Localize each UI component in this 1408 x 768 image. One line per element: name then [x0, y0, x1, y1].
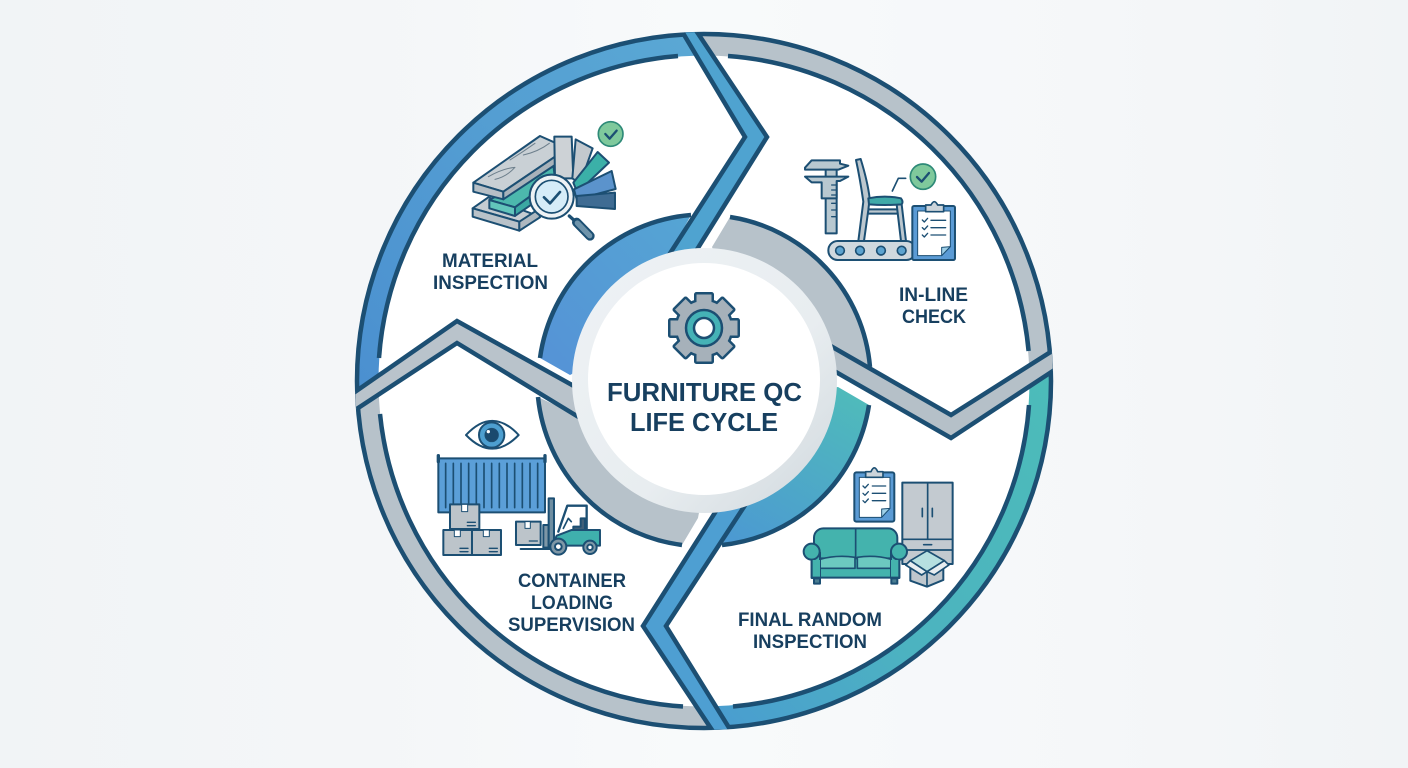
outer ring segments	[368, 45, 1040, 717]
icon: gear	[670, 294, 738, 362]
infographic: furniture QC life cycle	[354, 32, 1054, 730]
label: material inspection: INSPECTION	[433, 273, 548, 294]
title: FURNITURE QC	[607, 377, 802, 407]
label: in-line check: IN-LINE	[899, 285, 968, 306]
chevron separators	[352, 23, 1062, 739]
label: container loading supervision: LOADING	[531, 593, 613, 614]
inner ring lines of the outer band	[379, 56, 1029, 706]
icon: eye, container, boxes and forklift	[438, 421, 600, 555]
panel: final random inspection	[738, 468, 953, 653]
panel: in-line check	[805, 159, 968, 328]
label: material inspection: MATERIAL	[442, 251, 538, 272]
label: container loading supervision	[508, 571, 635, 636]
label: final random inspection: FINAL RANDOM	[738, 610, 882, 631]
label: in-line check: CHECK	[902, 307, 966, 328]
title: LIFE CYCLE	[630, 407, 778, 437]
outer ring outline	[357, 34, 1051, 728]
label: in-line check	[899, 285, 968, 328]
title	[607, 377, 802, 437]
inner ring segments	[538, 215, 870, 545]
disc base	[357, 34, 1051, 728]
label: material inspection	[433, 251, 548, 294]
label: final random inspection: INSPECTION	[753, 632, 867, 653]
icon: wood planks, swatches and magnifier	[473, 122, 623, 236]
label: final random inspection	[738, 610, 882, 653]
label: container loading supervision: SUPERVISION	[508, 615, 635, 636]
panel: material inspection	[433, 122, 623, 294]
icon: caliper, chair, conveyor and clipboard	[805, 159, 955, 260]
centre hub	[572, 248, 837, 513]
icon: clipboard, wardrobe, sofa and box	[804, 468, 953, 587]
panel: container loading supervision	[438, 421, 635, 636]
label: container loading supervision: CONTAINER	[518, 571, 626, 592]
